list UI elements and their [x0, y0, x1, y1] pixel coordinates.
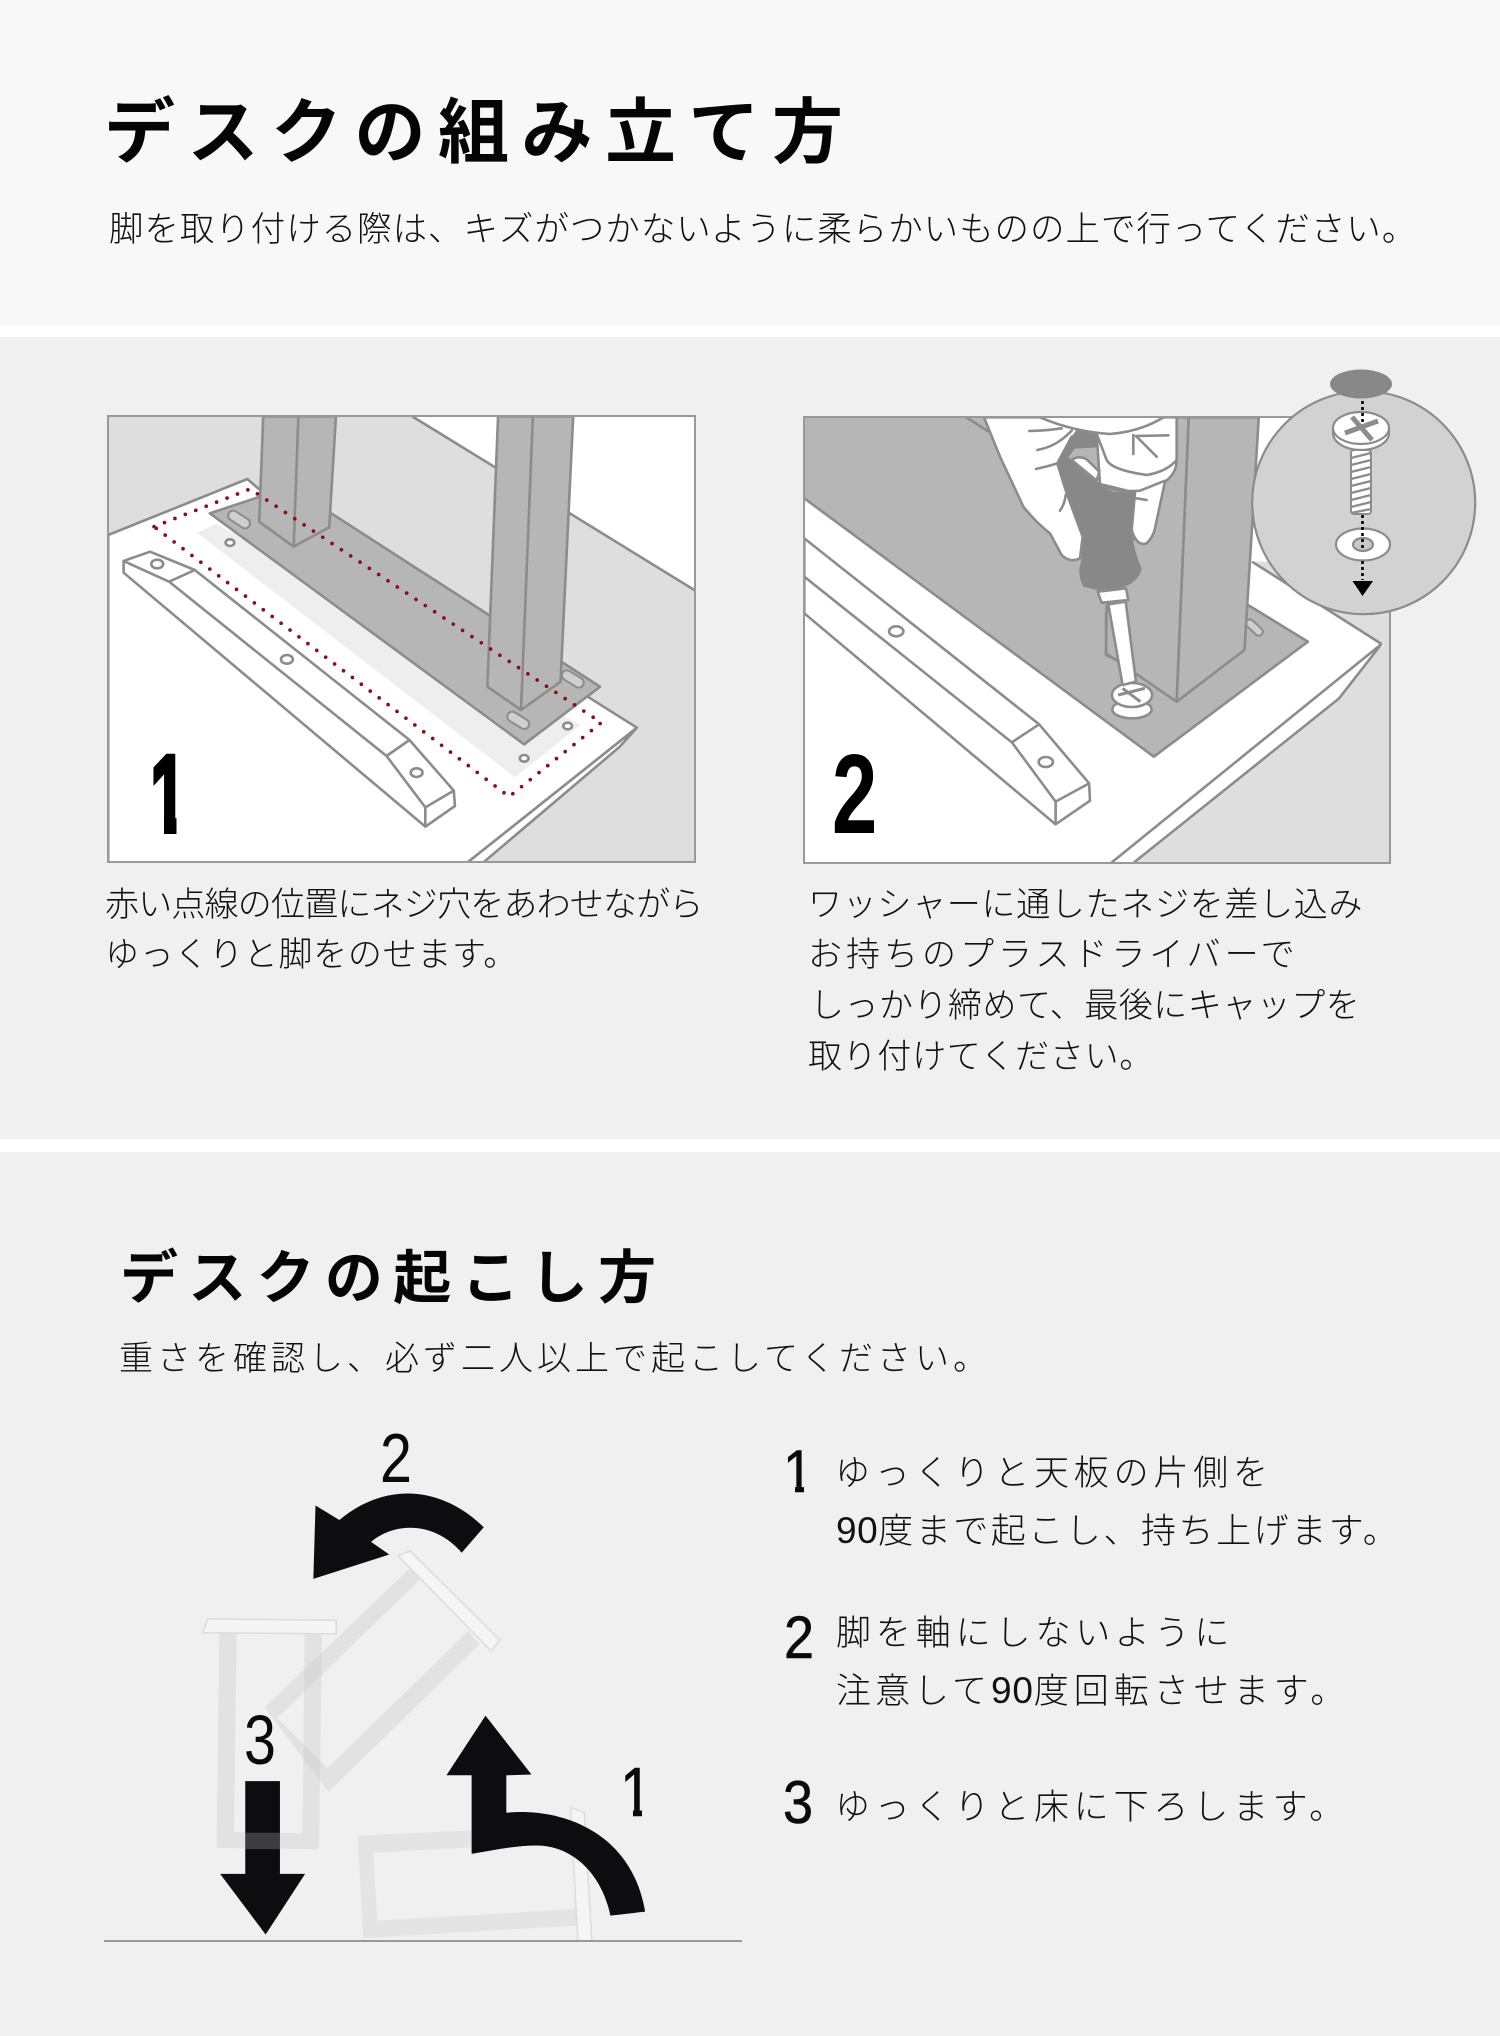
- panel: raising the desk: [0, 1152, 1500, 2036]
- text: step 1 caption: ゆっくりと脚をのせます。: [105, 936, 518, 974]
- illustration: step 2: [804, 370, 1475, 863]
- step 1: 90度まで起こし、持ち上げます。: [836, 1510, 1400, 1551]
- icon: hand with screwdriver: [984, 417, 1177, 660]
- icon: washer: [1336, 528, 1390, 560]
- step 1: [788, 1450, 1375, 1546]
- text: step 2 caption: しっかり締めて、最後にキャップを: [810, 987, 1360, 1025]
- step number 1: 1: [150, 735, 187, 853]
- text: step list: [784, 1450, 1375, 1824]
- desk: flat position: [358, 1807, 592, 1941]
- number label 3: 3: [244, 1701, 276, 1779]
- number label 1: 1: [620, 1753, 652, 1831]
- step 2: 脚を軸にしないように: [836, 1614, 1234, 1653]
- desk: tilted position: [265, 1551, 500, 1792]
- callout: screw detail circle: [1252, 370, 1475, 614]
- header panel: [0, 0, 1500, 326]
- panel: assembly steps: [0, 337, 1500, 1139]
- arrow 2: [313, 1493, 484, 1579]
- step 1: 1: [783, 1438, 813, 1506]
- arrow 1: [446, 1716, 645, 1916]
- small screw: [1112, 700, 1152, 718]
- heading: デスクの起こし方: [120, 1246, 666, 1311]
- base line: [104, 1940, 742, 1942]
- text: step 2 caption: 取り付けてください。: [808, 1038, 1154, 1076]
- icon: screw: [1333, 412, 1389, 514]
- text: step 1 caption: [105, 886, 703, 974]
- step 2: 注意して90度回転させます。: [836, 1670, 1350, 1711]
- text: step 2 caption: お持ちのプラスドライバーで: [808, 936, 1299, 974]
- step 2: 2: [784, 1604, 814, 1672]
- step 3: 3: [783, 1769, 813, 1837]
- text: step 1 caption: 赤い点線の位置にネジ穴をあわせながら: [105, 886, 703, 924]
- desk: upright position: [203, 1619, 336, 1849]
- text: step 2 caption: ワッシャーに通したネジを差し込み: [808, 886, 1363, 924]
- icon: cap: [1330, 370, 1392, 398]
- step 3: ゆっくりと床に下ろします。: [835, 1788, 1349, 1827]
- arrow: dotted screw axis: [1352, 401, 1373, 596]
- step 1: ゆっくりと天板の片側を: [835, 1454, 1273, 1493]
- subtitle: 脚を取り付ける際は、キズがつかないように柔らかいものの上で行ってください。: [109, 211, 1417, 249]
- illustration: step 1: [108, 416, 695, 862]
- title: デスクの組み立て方: [104, 94, 856, 173]
- step 3: [783, 1769, 1349, 1837]
- arrow 3: [220, 1781, 305, 1935]
- step 2: [784, 1604, 1350, 1711]
- subheading: 重さを確認し、必ず二人以上で起こしてください。: [119, 1340, 991, 1378]
- step number 2: 2: [832, 731, 877, 857]
- text: step 2 caption: [808, 886, 1363, 1076]
- illustration: raising sequence: [104, 1419, 742, 1941]
- number label 2: 2: [380, 1419, 412, 1497]
